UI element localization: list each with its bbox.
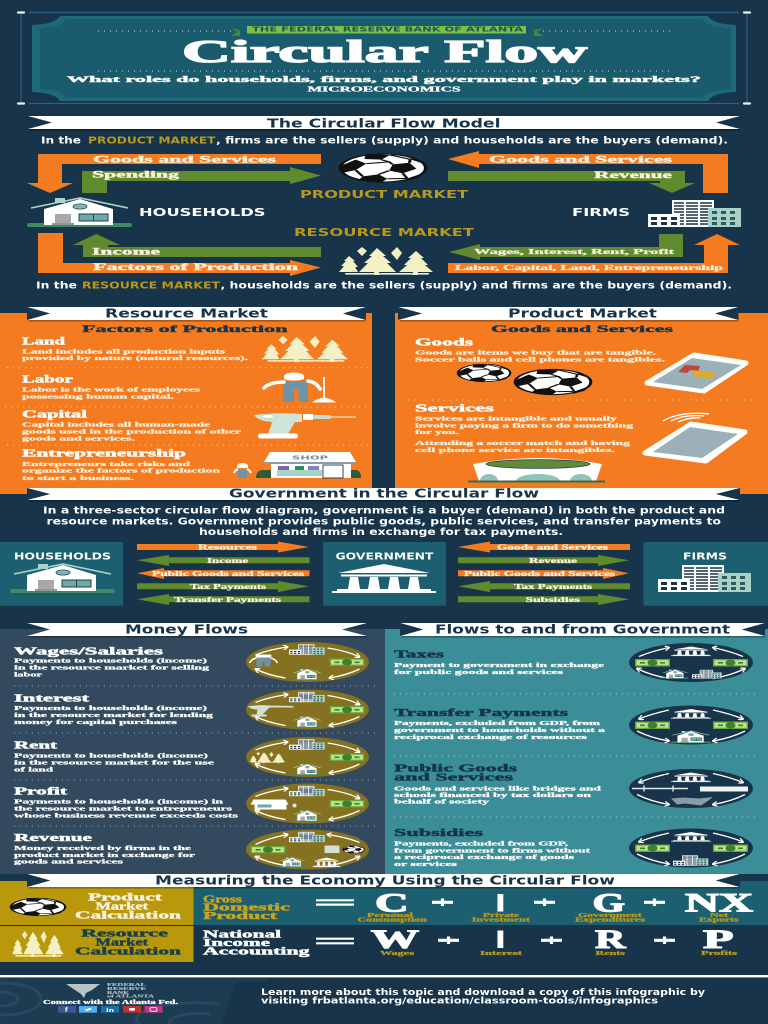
- subheading: goods and services: Goods and Services: [491, 324, 674, 335]
- panel: resource market calculation: Income: [203, 938, 271, 949]
- arrows: households to government: Income: [207, 557, 248, 565]
- text: product market sentence: In the: [41, 135, 81, 146]
- footer: learn more text: Learn more about this topic and download a copy of this infographic by: [261, 987, 706, 997]
- text: entrepreneurship: [22, 449, 221, 482]
- text: labor: possessing human capital.: [22, 394, 175, 401]
- arrow: income: Income: [92, 248, 160, 258]
- text: revenue: [14, 833, 195, 866]
- arrow: wages, interest, rent, profit: Wages, Interest, Rent, Profit: [474, 248, 675, 256]
- ribbon: resource market: Resource Market: [105, 306, 268, 320]
- text: public goods and services: Goods and services like bridges and: [394, 785, 602, 792]
- text: public goods and services: Public Goods: [394, 764, 517, 775]
- equation: GDP: G: [592, 888, 625, 917]
- subtitle: What roles do households, firms, and government play in markets?: [67, 74, 701, 84]
- panel: firms box: FIRMS: [683, 551, 727, 562]
- icon: power drill: [254, 413, 356, 438]
- text: wages and salaries: Wages/Salaries: [14, 646, 163, 657]
- icon: soccer ball, product market: [339, 154, 427, 182]
- title: Circular Flow: [182, 33, 587, 69]
- panel: resource market calculation: Accounting: [203, 947, 311, 958]
- text: taxes: [394, 650, 604, 676]
- arrows: households to government: Resources: [198, 544, 258, 552]
- icons: social media: in: [106, 1008, 114, 1014]
- text: transfer payments: reciprocal exchange of resources: [394, 734, 588, 741]
- text: services: for you.: [415, 429, 460, 436]
- text: goods: Soccer balls and cell phones are tangibles.: [415, 357, 666, 364]
- ribbon: product market: Product Market: [508, 306, 657, 320]
- footer: publisher block: Connect with the Atlanta Fed.: [43, 1000, 179, 1006]
- text: subsidies: from government to firms without: [394, 847, 592, 854]
- arrows: firms to government: Subsidies: [526, 596, 581, 604]
- equation: national income: Rents: [596, 951, 626, 957]
- text: capital: goods and services.: [22, 435, 136, 442]
- text: labor: Labor is the work of employees: [22, 386, 201, 393]
- icon: smartphone with signal: [645, 424, 745, 461]
- icon: land trees: [262, 336, 348, 362]
- equation: GDP: [316, 888, 753, 924]
- icon: wifi signal: [663, 413, 709, 422]
- footer: learn more text: visiting frbatlanta.org/education/classroom-tools/infographics: [261, 995, 658, 1005]
- text: rent: in the resource market for the use: [14, 760, 214, 767]
- arrows: households to government: Public Goods and Services: [152, 570, 305, 578]
- equation: GDP: Consumption: [358, 918, 428, 924]
- equation: GDP: C: [375, 888, 408, 917]
- equation: GDP: Net: [710, 913, 728, 919]
- ribbon: money flows: [27, 622, 367, 638]
- text: transfer payments: Transfer Payments: [394, 708, 568, 719]
- ribbon: measuring the economy: Measuring the Economy Using the Circular Flow: [155, 873, 615, 888]
- icon: firm buildings: [648, 200, 741, 227]
- diagram: public goods flow: [629, 769, 753, 808]
- subheading: factors of production: Factors of Production: [82, 324, 289, 335]
- text: land: provided by nature (natural resources).: [22, 355, 249, 362]
- text: transfer payments: [394, 708, 606, 741]
- icon: stadium: [468, 458, 605, 482]
- header panel: [18, 12, 750, 104]
- panel: product market: [395, 306, 768, 494]
- text: capital: goods used in the production of other: [22, 428, 241, 435]
- panel: resource market calculation: Market: [96, 937, 149, 948]
- footer: publisher block: of ATLANTA: [107, 994, 156, 998]
- panel: product market calculation: Product: [203, 911, 278, 922]
- arrow: labor, capital, land, entrepreneurship: [448, 234, 740, 273]
- diagram: revenue flow: [246, 830, 369, 870]
- text: land: [22, 336, 249, 362]
- arrow: wages, interest, rent, profit: [449, 234, 683, 260]
- text: capital: [22, 409, 241, 442]
- arrows: households to government: [137, 542, 310, 605]
- panel: firms box: [644, 542, 768, 606]
- equation: national income: I: [495, 926, 506, 954]
- panel: government box: GOVERNMENT: [336, 551, 434, 562]
- arrow: goods and services from firms: Goods and Services: [489, 155, 673, 165]
- equation: GDP: Expenditures: [575, 918, 646, 924]
- icon: shop: SHOP: [292, 456, 328, 462]
- panel: flows to and from government: [385, 622, 768, 874]
- text: public goods and services: schools financed by tax dollars on: [394, 792, 592, 799]
- arrow: goods and services to households: Goods and Services: [93, 155, 277, 165]
- text: public goods and services: [394, 764, 602, 806]
- ribbon: money flows: Money Flows: [125, 622, 248, 636]
- text: profit: whose business revenue exceeds costs: [14, 812, 239, 819]
- panel: households box: HOUSEHOLDS: [14, 551, 111, 562]
- icon: small worker: [234, 463, 251, 478]
- text: goods: Goods are items we buy that are tangible.: [415, 350, 657, 357]
- panel: households box: [0, 542, 123, 606]
- text: rent: Payments to households (income): [14, 753, 208, 760]
- text: resource market sentence: , households are the sellers (supply) and firms are the buyers (demand).: [220, 281, 732, 292]
- text: rent: Rent: [14, 741, 58, 752]
- icons: social media: [58, 1006, 162, 1014]
- text: profit: [14, 787, 239, 819]
- text: interest: Payments to households (income): [14, 705, 207, 712]
- text: transfer payments: Payments, excluded from GDP, from: [394, 720, 601, 727]
- text: services: involve paying a firm to do something: [415, 422, 634, 429]
- text: wages and salaries: labor: [14, 671, 42, 678]
- text: interest: Interest: [14, 693, 90, 704]
- arrow: revenue: [448, 171, 695, 193]
- text: taxes: Payment to government in exchange: [394, 662, 604, 669]
- text: profit: the resource market to entrepreneurs: [14, 806, 233, 813]
- text: land: Land: [22, 336, 65, 347]
- panel: product market calculation: Calculation: [75, 910, 181, 921]
- label: resource market: RESOURCE MARKET: [294, 226, 475, 239]
- arrow: revenue: Revenue: [594, 171, 672, 181]
- equation: national income: [316, 925, 738, 957]
- text: subsidies: a reciprocal exchange of goods: [394, 854, 575, 861]
- text: entrepreneurship: Entrepreneurs take risks and: [22, 461, 191, 468]
- diagram: interest flow: [246, 690, 369, 730]
- text: wages and salaries: in the resource market for selling: [14, 665, 210, 672]
- text: labor: [22, 374, 201, 401]
- footer: publisher block: RESERVE: [107, 986, 146, 991]
- text: subsidies: Subsidies: [394, 828, 483, 839]
- text: government description: households and firms in exchange for tax payments.: [199, 527, 563, 538]
- text: government description: [43, 506, 725, 538]
- text: wages and salaries: [14, 646, 210, 678]
- text: taxes: for public goods and services: [394, 669, 564, 676]
- label: firms: FIRMS: [572, 206, 630, 219]
- arrow: goods and services from firms: [448, 151, 728, 193]
- text: capital: Capital includes all human-made: [22, 421, 210, 428]
- text: product market sentence: , firms are the sellers (supply) and households are the buyers (demand).: [216, 135, 728, 146]
- equation: GDP: Investment: [472, 918, 530, 924]
- icon: soccer ball small: [457, 364, 511, 382]
- text: resource market sentence: In the: [36, 281, 77, 292]
- label: households: HOUSEHOLDS: [139, 206, 266, 219]
- equation: national income: Profits: [701, 951, 738, 957]
- panel: product market calculation: Market: [96, 901, 149, 912]
- panel: product market calculation: Product: [88, 893, 163, 904]
- ribbon: publisher name: [231, 24, 543, 36]
- diagram: transfer payments flow: [629, 706, 753, 744]
- footer: publisher block: BANK: [107, 990, 130, 995]
- heading: The Circular Flow Model: [28, 115, 740, 131]
- text: transfer payments: government to households without a: [394, 727, 606, 734]
- text: land: Land includes all production inputs: [22, 348, 226, 355]
- panel: product market calculation: Gross: [203, 894, 242, 905]
- text: interest: in the resource market for lending: [14, 712, 214, 719]
- equation: GDP: NX: [685, 888, 753, 917]
- arrows: firms to government: Goods and Services: [497, 544, 609, 552]
- text: subsidies: [394, 828, 592, 868]
- footer: learn more text: [261, 987, 706, 1005]
- text: taxes: Taxes: [394, 650, 444, 661]
- text: public goods and services: and Services: [394, 772, 513, 783]
- icon: Federal Reserve eagle logo: [66, 984, 100, 998]
- text: entrepreneurship: organize the factors of production: [22, 468, 221, 475]
- panel: resource market: [0, 306, 372, 494]
- equation: national income: Wages: [380, 951, 415, 957]
- text: revenue: product market in exchange for: [14, 852, 195, 859]
- ribbon: resource market: [27, 306, 366, 322]
- arrow: goods and services to households: [27, 154, 321, 193]
- text: goods: [415, 338, 666, 364]
- heading: The Circular Flow Model: The Circular Flow Model: [267, 115, 500, 130]
- footer: publisher block: FEDERAL: [107, 982, 146, 987]
- panel: product market calculation: [0, 881, 768, 925]
- text: entrepreneurship: to start a business.: [22, 475, 135, 482]
- panel: government box: [323, 542, 446, 606]
- equation: GDP: Personal: [367, 913, 414, 919]
- equation: GDP: Exports: [699, 918, 740, 924]
- equation: GDP: Private: [483, 913, 520, 919]
- category label: MICROECONOMICS: [308, 86, 460, 94]
- text: rent: [14, 741, 214, 773]
- arrows: firms to government: Tax Payments: [514, 583, 592, 591]
- arrows: households to government: Tax Payments: [190, 583, 266, 591]
- arrow: factors of production: Factors of Production: [93, 263, 300, 273]
- equation: GDP: I: [495, 889, 506, 917]
- panel: money flows: [0, 622, 385, 874]
- panel: resource market calculation: Calculation: [75, 946, 181, 957]
- panel: resource market calculation: National: [203, 929, 281, 940]
- text: interest: [14, 693, 214, 726]
- text: capital: Capital: [22, 409, 87, 420]
- equation: national income: P: [703, 925, 734, 954]
- icon: trees, resource market: [339, 247, 433, 275]
- text: revenue: Money received by firms in the: [14, 845, 191, 852]
- text: government description: resource markets. Government provides public goods, public services, and transfer payments to: [46, 516, 721, 527]
- text: services: Attending a soccer match and having: [415, 440, 631, 447]
- arrow: income: [73, 234, 321, 258]
- equation: GDP: Government: [578, 913, 642, 919]
- heading: Government in the Circular Flow: [27, 486, 740, 502]
- arrow: labor, capital, land, entrepreneurship: Labor, Capital, Land, Entrepreneurship: [455, 264, 723, 272]
- diagram: subsidies flow: [629, 828, 753, 868]
- text: services: Services: [415, 403, 494, 414]
- text: goods: Goods: [415, 338, 473, 349]
- text: subsidies: Payments, excluded from GDP,: [394, 840, 569, 847]
- text: entrepreneurship: Entrepreneurship: [22, 449, 186, 460]
- arrows: firms to government: [458, 542, 630, 605]
- ribbon: product market: [398, 306, 738, 322]
- ribbon: flows to and from government: Flows to and from Government: [435, 622, 730, 636]
- ribbon: publisher name: THE FEDERAL RESERVE BANK OF ATLANTA: [252, 24, 524, 34]
- icons: social media: f: [65, 1007, 68, 1014]
- label: product market: PRODUCT MARKET: [300, 188, 469, 201]
- text: public goods and services: behalf of society: [394, 799, 490, 806]
- arrows: firms to government: Public Goods and Services: [464, 570, 616, 578]
- diagram: wages flow: [246, 642, 369, 682]
- text: labor: Labor: [22, 374, 74, 385]
- arrows: households to government: Transfer Payments: [174, 596, 281, 604]
- text: subsidies: or services: [394, 861, 458, 868]
- heading: Government in the Circular Flow: Government in the Circular Flow: [229, 486, 539, 501]
- text: wages and salaries: Payments to households (income): [14, 658, 207, 665]
- panel: product market calculation: Domestic: [203, 903, 291, 914]
- text: rent: of land: [14, 766, 54, 773]
- icon: household: [27, 198, 132, 227]
- ribbon: measuring the economy: [27, 873, 740, 889]
- icon: worker with broom: [264, 372, 336, 402]
- icon: smartphone with chart: [647, 355, 746, 391]
- arrow: spending: Spending: [92, 171, 180, 181]
- equation: national income: R: [595, 925, 626, 954]
- text: revenue: Revenue: [14, 833, 93, 844]
- text: resource market sentence: RESOURCE MARKET: [82, 281, 220, 292]
- text: services: cell phone service are intangibles.: [415, 447, 616, 454]
- icon: soccer ball large: [514, 369, 592, 395]
- text: services: [415, 403, 634, 454]
- equation: national income: W: [371, 925, 419, 954]
- diagram: taxes flow: [629, 643, 753, 682]
- text: interest: money for capital purchases: [14, 719, 178, 726]
- footer: publisher block: [0, 978, 267, 1024]
- icon: shop: [256, 452, 361, 478]
- equation: national income: Interest: [480, 951, 522, 957]
- text: government description: In a three-sector circular flow diagram, government is a buyer (demand) in both the product and: [43, 506, 725, 517]
- text: profit: Profit: [14, 787, 68, 798]
- arrow: spending: [82, 167, 321, 193]
- diagram: profit flow: [246, 784, 369, 824]
- arrows: firms to government: Revenue: [529, 557, 577, 565]
- text: profit: Payments to households (income) in: [14, 799, 224, 806]
- diagram: rent flow: [246, 737, 369, 777]
- arrow: factors of production: [38, 233, 321, 276]
- panel: resource market calculation: [0, 925, 738, 962]
- ribbon: flows to and from government: [400, 622, 765, 638]
- text: revenue: goods and services: [14, 859, 124, 866]
- footer: decorative rule: [0, 975, 768, 977]
- text: services: Services are intangible and usually: [415, 415, 618, 422]
- panel: resource market calculation: Resource: [81, 929, 169, 940]
- text: product market sentence: PRODUCT MARKET: [88, 135, 216, 146]
